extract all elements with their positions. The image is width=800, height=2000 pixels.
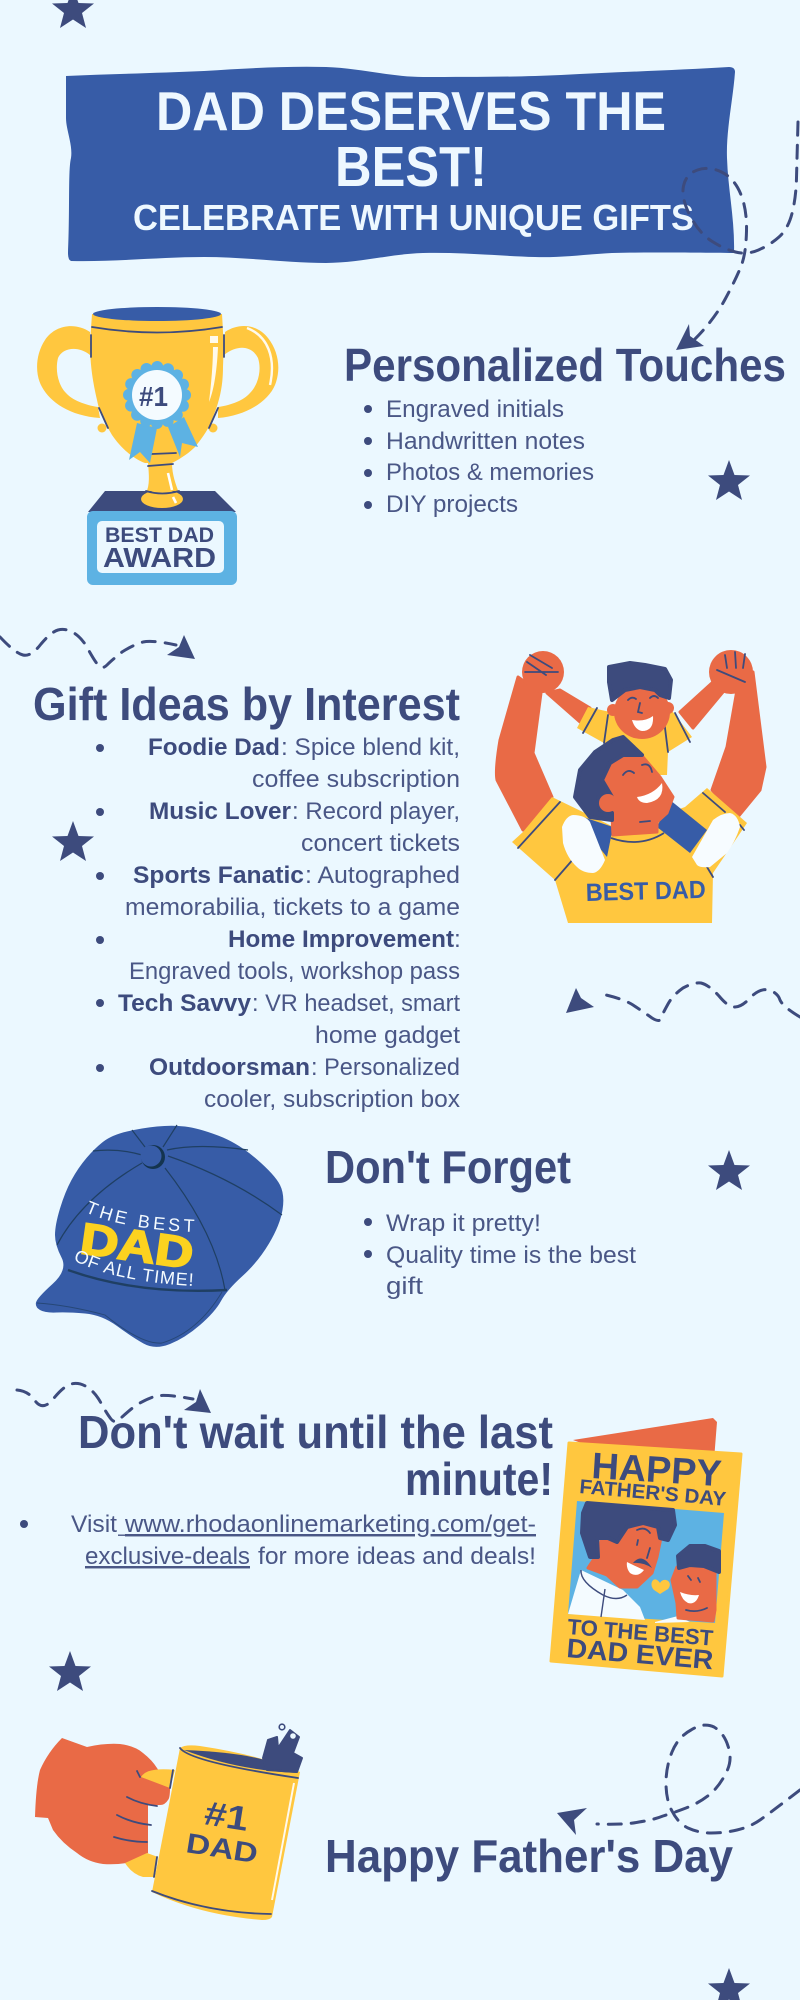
icon: father's day card: DAD EVER <box>565 1633 714 1675</box>
list: Quality time is the best <box>386 1242 636 1269</box>
dashed arrow bottom right <box>557 1725 800 1835</box>
tech savvy <box>118 990 460 1049</box>
visit link text: for more ideas and deals! <box>258 1543 536 1570</box>
mug handle <box>141 1769 175 1788</box>
star right of personalized touches <box>708 460 750 500</box>
heading: Don't Forget <box>325 1141 571 1193</box>
tech savvy: Tech Savvy <box>118 990 251 1017</box>
icon: father's day card: TO THE BEST <box>567 1614 715 1651</box>
dashed arrow above don't wait <box>17 1383 211 1422</box>
father <box>568 1570 645 1620</box>
icon: father's day card <box>551 1418 741 1676</box>
visit link text: Visit <box>71 1511 117 1538</box>
list: Handwritten notes <box>386 428 585 455</box>
icon: trophy <box>37 307 278 585</box>
music lover <box>149 798 460 857</box>
panel: don't wait until the last minute <box>20 1406 553 1570</box>
list <box>364 396 594 518</box>
icon: trophy: AWARD <box>103 542 216 573</box>
star top left <box>52 0 94 28</box>
hand <box>35 1738 170 1864</box>
sports fanatic: : Autographed <box>305 862 460 889</box>
visit link text: exclusive-deals <box>85 1543 250 1570</box>
foodie dad: coffee subscription <box>252 766 460 793</box>
coffee splash <box>263 1730 302 1772</box>
icon: baseball cap: THE BEST <box>89 1200 194 1232</box>
list: Engraved initials <box>386 396 564 423</box>
dashed arrow top right <box>676 122 798 350</box>
home improvement: Home Improvement <box>228 926 454 953</box>
heading: Don't wait until the last <box>78 1406 553 1458</box>
home improvement: : <box>454 926 461 953</box>
panel: don't forget <box>325 1141 636 1300</box>
panel: personalized touches <box>344 339 786 518</box>
closing heading: Happy Father's Day <box>325 1830 733 1882</box>
icon: father's day card: FATHER'S DAY <box>579 1476 728 1511</box>
title banner <box>66 67 735 263</box>
list: Photos & memories <box>386 459 594 486</box>
foodie dad <box>148 734 460 793</box>
sports fanatic <box>125 862 460 921</box>
foodie dad: Foodie Dad <box>148 734 280 761</box>
icon: hand holding mug <box>35 1724 302 1920</box>
dad arms <box>496 677 552 830</box>
visit link text <box>20 1511 536 1570</box>
icon: trophy: #1 <box>139 381 168 412</box>
icon: baseball cap: DAD <box>78 1214 196 1279</box>
icon: dad carrying child <box>496 650 765 923</box>
outdoorsman: cooler, subscription box <box>204 1086 460 1113</box>
child arms <box>547 690 590 722</box>
star lower left <box>49 1651 91 1691</box>
child head <box>607 704 619 716</box>
home improvement <box>129 926 461 985</box>
main title: DAD DESERVES THE <box>156 80 666 142</box>
list: gift <box>386 1273 423 1300</box>
star right of don't forget <box>708 1150 750 1190</box>
child legs <box>657 800 707 853</box>
child shirt <box>577 707 692 775</box>
star left of gift ideas <box>52 821 94 861</box>
icon: dad carrying child: BEST DAD <box>585 876 706 907</box>
main title <box>133 80 694 238</box>
icon: trophy: BEST DAD <box>105 524 214 547</box>
sports fanatic: Sports Fanatic <box>133 862 304 889</box>
icon: baseball cap <box>36 1124 284 1347</box>
panel: gift ideas by interest <box>33 678 461 1113</box>
panel: don't wait until the last minute: minute! <box>405 1453 553 1505</box>
dad head <box>602 753 673 835</box>
dashed arrow above gift ideas <box>0 629 195 668</box>
foodie dad: : Spice blend kit, <box>281 734 460 761</box>
heading: Gift Ideas by Interest <box>33 678 460 730</box>
dashed arrow right of gift ideas <box>566 983 800 1020</box>
visit link text: www.rhodaonlinemarketing.com/get- <box>124 1511 536 1538</box>
icon: father's day card: HAPPY <box>590 1445 723 1494</box>
outdoorsman: : Personalized <box>311 1054 460 1081</box>
tech savvy: home gadget <box>315 1022 460 1049</box>
sports fanatic: memorabilia, tickets to a game <box>125 894 460 921</box>
star bottom right <box>708 1968 750 2000</box>
main title: BEST! <box>335 135 487 199</box>
list: Wrap it pretty! <box>386 1210 541 1237</box>
heart <box>652 1579 670 1594</box>
icon: baseball cap: OF ALL TIME! <box>76 1251 192 1286</box>
music lover: Music Lover <box>149 798 291 825</box>
main title: CELEBRATE WITH UNIQUE GIFTS <box>133 197 694 238</box>
dad shirt <box>512 788 747 923</box>
child <box>655 1616 690 1623</box>
list <box>364 1210 636 1300</box>
icon: hand holding mug: DAD <box>184 1827 260 1869</box>
shoes <box>562 815 605 873</box>
fists <box>522 651 564 693</box>
music lover: : Record player, <box>292 798 460 825</box>
home improvement: Engraved tools, workshop pass <box>129 958 460 985</box>
tech savvy: : VR headset, smart <box>252 990 460 1017</box>
bullets <box>96 744 104 1072</box>
outdoorsman <box>149 1054 460 1113</box>
outdoorsman: Outdoorsman <box>149 1054 310 1081</box>
music lover: concert tickets <box>301 830 460 857</box>
list: DIY projects <box>386 491 518 518</box>
mug body <box>152 1745 300 1920</box>
icon: hand holding mug: #1 <box>202 1794 251 1839</box>
